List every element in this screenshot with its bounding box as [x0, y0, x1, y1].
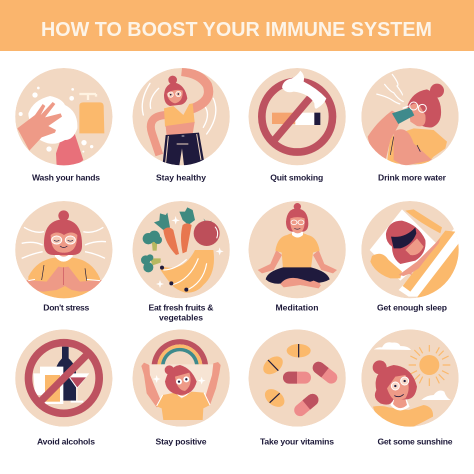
icon: quit smoking: [248, 68, 346, 165]
labels: Drink more water: [378, 172, 447, 182]
labels: Quit smoking: [270, 172, 323, 182]
icon: stay healthy: [132, 68, 230, 165]
labels: Don't stress: [43, 302, 90, 312]
icon: stay positive: [132, 329, 230, 427]
labels: Stay healthy: [156, 172, 206, 182]
header banner: [0, 0, 474, 51]
labels: Take your vitamins: [260, 436, 334, 446]
labels: Eat fresh fruits &: [148, 302, 214, 312]
labels: Get enough sleep: [377, 302, 447, 312]
labels: Wash your hands: [32, 172, 100, 182]
icon: get some sunshine: [361, 329, 459, 427]
icon: take your vitamins: [248, 329, 346, 427]
icon: drink more water: [361, 68, 459, 166]
icon: fresh fruits and vegetables: [132, 201, 230, 298]
icon: meditation: [248, 201, 346, 298]
icon: avoid alcohols: [15, 329, 112, 427]
title: HOW TO BOOST YOUR IMMUNE SYSTEM: [41, 18, 432, 41]
icon: do not stress: [15, 201, 112, 298]
labels: Get some sunshine: [378, 436, 453, 446]
labels: [32, 172, 453, 446]
icon: get enough sleep: [361, 201, 461, 298]
labels: vegetables: [159, 313, 203, 323]
icon: wash your hands: [15, 68, 112, 167]
labels: Meditation: [276, 302, 318, 312]
labels: Avoid alcohols: [37, 436, 95, 446]
labels: Stay positive: [156, 436, 207, 446]
